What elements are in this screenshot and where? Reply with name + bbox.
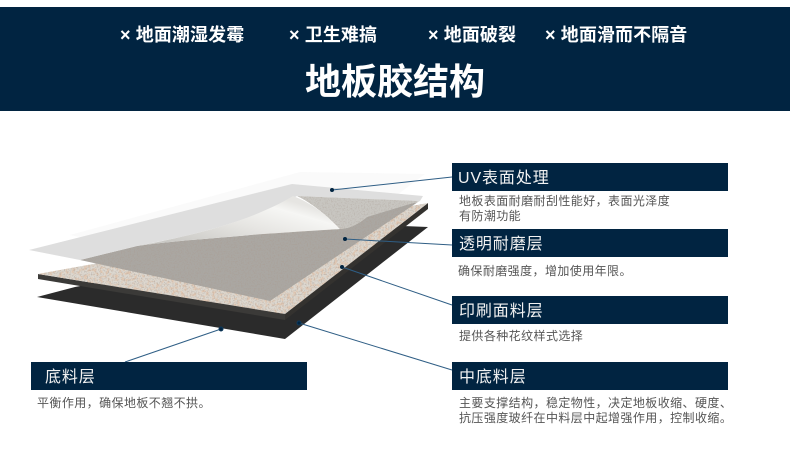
label bar: base layer xyxy=(31,362,307,390)
label bar: printed layer xyxy=(452,296,728,324)
label bar: base layer: 底料层 xyxy=(45,369,96,386)
description: UV surface treatment xyxy=(459,194,670,222)
description: UV surface treatment: 有防潮功能 xyxy=(459,208,521,222)
label bar: UV surface treatment: UV表面处理 xyxy=(458,170,550,187)
description: middle base layer: 抗压强度玻纤在中料层中起增强作用，控制收缩。 xyxy=(459,410,732,424)
description: base layer: 平衡作用，确保地板不翘不拱。 xyxy=(37,396,211,410)
label bar: transparent wear layer xyxy=(452,229,728,257)
title: 地板胶结构 xyxy=(305,61,485,102)
leader line: printed layer xyxy=(340,265,452,305)
problem tag: slippery and noisy: × 地面滑而不隔音 xyxy=(545,25,687,45)
description: printed layer: 提供各种花纹样式选择 xyxy=(459,329,583,343)
label bar: transparent wear layer: 透明耐磨层 xyxy=(459,236,544,253)
printed layer xyxy=(30,195,435,320)
label bar: UV surface treatment xyxy=(452,163,728,191)
leader line: base layer xyxy=(125,327,223,362)
wear layer xyxy=(75,198,425,303)
label bar: middle base layer: 中底料层 xyxy=(459,369,527,386)
label bar: printed layer: 印刷面料层 xyxy=(459,303,544,320)
description: middle base layer: 主要支撑结构，稳定物性，决定地板收缩、硬度、 xyxy=(459,396,732,410)
leader line: wear layer xyxy=(343,237,452,245)
problem tag: hard to clean: × 卫生难搞 xyxy=(289,25,377,45)
leader line: UV layer xyxy=(330,177,452,192)
problem tag: cracked floor: × 地面破裂 xyxy=(428,25,516,45)
base layer xyxy=(37,226,428,339)
leader line: middle base layer xyxy=(297,321,452,370)
exploded floor layer diagram xyxy=(30,176,452,370)
header banner xyxy=(0,7,790,111)
description: UV surface treatment: 地板表面耐磨耐刮性能好，表面光泽度 xyxy=(459,194,670,208)
description: middle base layer xyxy=(459,396,732,424)
UV sheet xyxy=(30,184,423,260)
description: transparent wear layer: 确保耐磨强度，增加使用年限。 xyxy=(458,264,632,278)
label bar: middle base layer xyxy=(452,362,728,390)
problem tag: damp and mould: × 地面潮湿发霉 xyxy=(120,25,244,45)
